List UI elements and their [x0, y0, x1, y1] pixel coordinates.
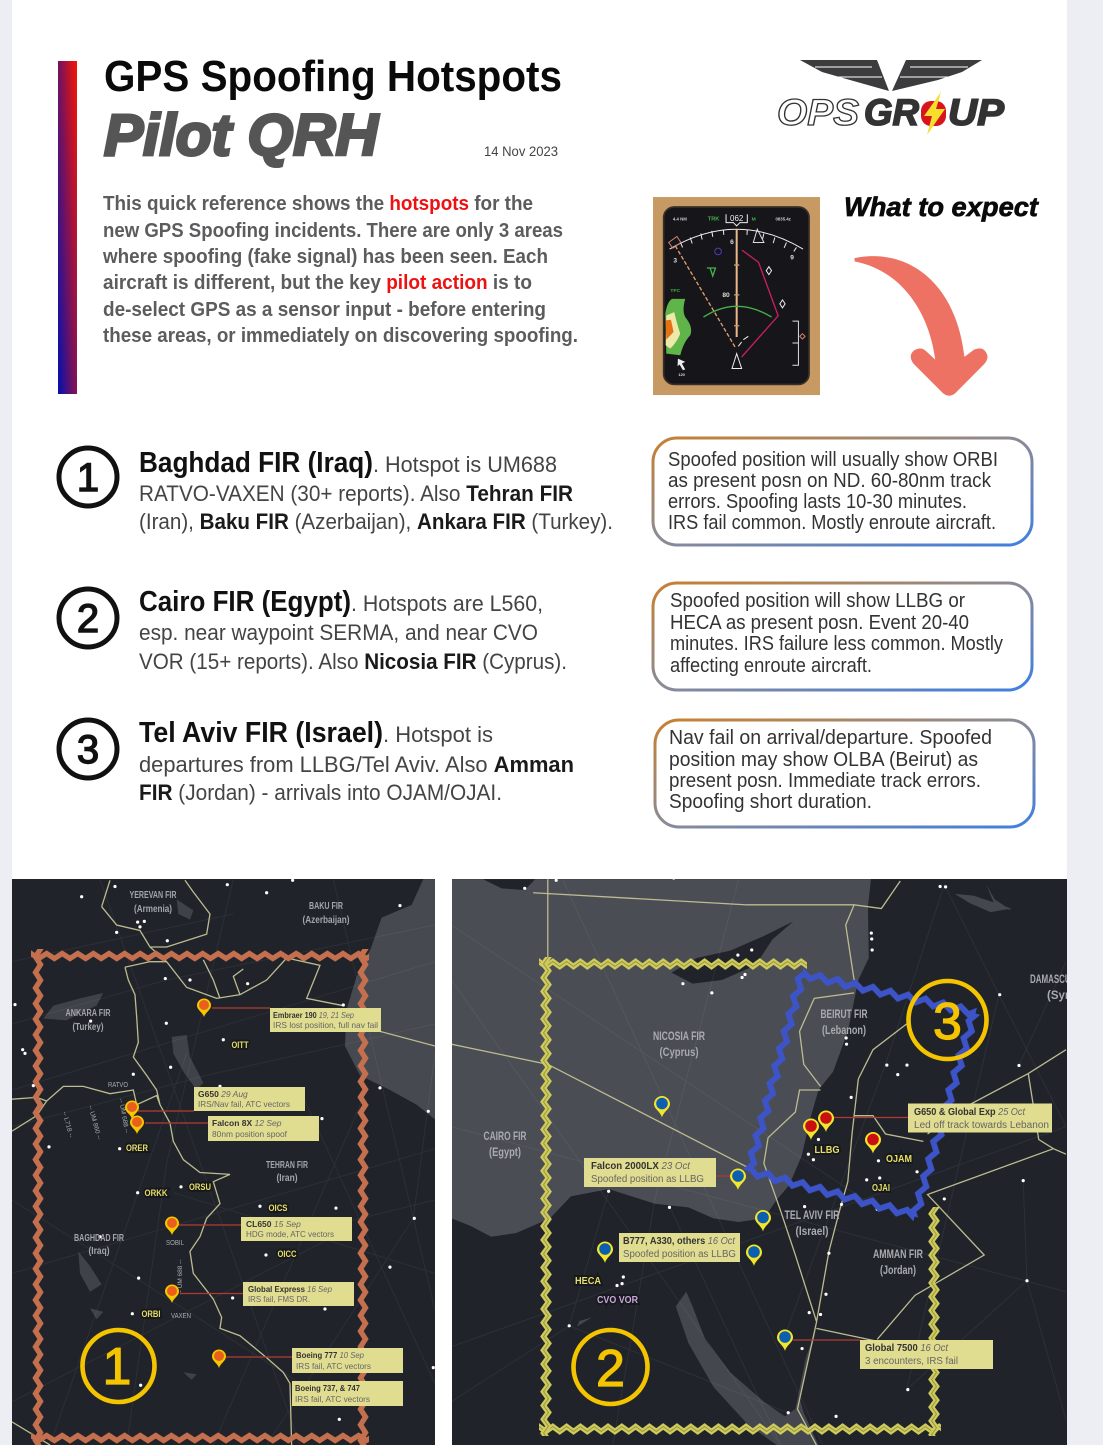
area number 3 — [908, 981, 986, 1059]
callout box 2: minutes. IRS failure less common. Mostly — [670, 633, 1003, 655]
item 3: Tel Aviv — [59, 717, 574, 805]
item 2: Cairo — [59, 586, 567, 674]
FIR labels map 2: (Israel) — [796, 1226, 829, 1238]
intro paragraph: aircraft is different, but the key pilot action is to — [103, 272, 532, 294]
logo: OPS GROUP: UP — [948, 92, 1004, 133]
intro paragraph: these areas, or immediately on discovering spoofing. — [103, 325, 578, 347]
FIR labels map 2: NICOSIA FIR — [653, 1031, 706, 1043]
intro paragraph: new GPS Spoofing incidents. There are only 3 areas — [103, 220, 563, 242]
waypoints map 1: OICS — [268, 1203, 288, 1213]
navigation display image — [653, 197, 820, 395]
waypoints map 1: ORSU — [189, 1182, 211, 1192]
area number 2: 2 — [596, 1340, 625, 1398]
navigation display image: TFC — [670, 288, 680, 294]
navigation display image: 120 — [678, 372, 686, 377]
waypoints map 2: LLBG — [814, 1144, 840, 1156]
item 1: Baghdad: RATVO-VAXEN (30+ reports). Also Tehran FIR — [139, 481, 573, 506]
incident tag: CL650: HDG mode, ATC vectors — [246, 1229, 334, 1239]
intro paragraph: where spoofing (fake signal) has been seen. Each — [102, 246, 548, 268]
area number 2 — [574, 1330, 648, 1404]
FIR labels map 1: BAGHDAD FIR — [74, 1233, 125, 1244]
map panel 2: Egypt, Cyprus, Israel, Jordan — [451, 878, 1083, 1445]
incident tag: Boeing 737 and 747: IRS fail, ATC vectors — [295, 1394, 370, 1404]
curved salmon arrow — [855, 256, 988, 396]
FIR labels map 1: BAKU FIR — [309, 901, 344, 912]
FIR labels map 1 — [66, 890, 350, 1257]
waypoints map 2: OJAI — [872, 1182, 890, 1194]
yellow zigzag boundary — [539, 957, 941, 1436]
callout box 1: as present posn on ND. 60-80nm track — [668, 470, 992, 492]
navigation display image: 6 — [730, 239, 734, 246]
incident tag: Falcon 8X — [208, 1116, 319, 1141]
incident tag: Falcon 8X: Falcon 8X 12 Sep — [212, 1118, 282, 1128]
FIR labels map 2: DAMASCUS — [1030, 974, 1076, 986]
callout box 1: errors. Spoofing lasts 10-30 minutes. — [668, 491, 967, 513]
waypoints map 1: RATVO — [108, 1080, 128, 1089]
FIR labels map 2: TEL AVIV FIR — [784, 1210, 840, 1222]
navigation display image: TRK — [708, 216, 720, 222]
incident tag: Global 7500 — [860, 1340, 993, 1369]
item 3: Tel Aviv: departures from LLBG/Tel Aviv. Also Amman — [139, 752, 574, 777]
area number 1 — [82, 1330, 154, 1402]
intro paragraph — [102, 193, 578, 347]
FIR labels map 1: YEREVAN FIR — [130, 890, 177, 901]
navigation display image: 062 — [730, 214, 744, 223]
navigation display image: 0835.4z — [776, 216, 791, 221]
callout box 2 — [653, 583, 1032, 690]
incident tag: Embraer 190: IRS lost position, full nav fail — [273, 1020, 378, 1030]
incident tag: G650: IRS/Nav fail, ATC vectors — [198, 1099, 290, 1109]
FIR labels map 2: (Jordan) — [880, 1265, 916, 1277]
incident tag: Falcon 2000LX — [584, 1158, 716, 1187]
blue zigzag boundary — [741, 966, 982, 1223]
incident tag: Global Express: IRS fail, FMS DR. — [248, 1294, 310, 1304]
waypoints map 1: -- UM 860 -- — [87, 1105, 102, 1140]
waypoints map 1: OITT — [232, 1040, 249, 1050]
what to expect heading: What to expect — [844, 192, 1039, 222]
incident leaders map 2 — [716, 1118, 908, 1340]
incident tag: Global Express: Global Express 16 Sep — [248, 1284, 332, 1294]
subtitle: Pilot QRH: Pilot QRH — [104, 103, 379, 168]
waypoints map 1: ORBI — [142, 1309, 160, 1319]
incident tag: G650 and Global Exp: Led off track towards Lebanon — [914, 1120, 1049, 1131]
item 2: Cairo: Cairo FIR (Egypt) — [139, 586, 351, 618]
waypoints map 2 — [575, 1144, 912, 1306]
FIR labels map 1: (Iraq) — [88, 1246, 110, 1257]
callout box 1: Spoofed position will usually show ORBI — [668, 449, 998, 471]
FIR labels map 1: TEHRAN FIR — [266, 1160, 309, 1171]
callout box 2: HECA as present posn. Event 20-40 — [670, 612, 969, 634]
FIR labels map 2: (Syria) — [1047, 990, 1083, 1002]
logo: OPS GROUP — [777, 60, 1004, 135]
FIR labels map 2: BEIRUT FIR — [820, 1009, 868, 1021]
incident tag: Falcon 2000LX: Spoofed position as LLBG — [591, 1174, 704, 1185]
waypoints map 1: ORKK — [144, 1188, 168, 1198]
FIR labels map 1: ANKARA FIR — [66, 1008, 111, 1019]
item 2: Cairo: 2 — [77, 597, 99, 641]
callout box 2: affecting enroute aircraft. — [670, 655, 872, 677]
incident tag: G650 and Global Exp — [908, 1104, 1052, 1132]
incident tag: CL650 — [241, 1217, 352, 1241]
navigation display image: 9 — [790, 255, 794, 262]
incident tag: Boeing 737 and 747: Boeing 737, & 747 — [295, 1383, 360, 1393]
incident pins map 2 — [597, 1096, 881, 1351]
intro paragraph: de-select GPS as a sensor input - before entering — [103, 299, 546, 321]
incident tag: Global 7500: Global 7500 16 Oct — [865, 1343, 949, 1354]
waypoints map 2: OJAM — [886, 1153, 912, 1165]
waypoints map 1: -- UM 688 -- — [117, 1098, 130, 1134]
waypoints map 1: -- UM 688 -- — [177, 1259, 184, 1295]
incident tag: Falcon 2000LX: Falcon 2000LX 23 Oct — [591, 1161, 691, 1172]
incident tag: G650 and Global Exp: G650 & Global Exp 25 Oct — [914, 1107, 1026, 1118]
callout box 1: IRS fail common. Mostly enroute aircraft. — [668, 512, 996, 534]
incident tag: Boeing 737 and 747 — [292, 1381, 403, 1406]
waypoints map 1: SOBIL — [166, 1238, 184, 1247]
callout box 3: Nav fail on arrival/departure. Spoofed — [669, 727, 992, 749]
date: 14 Nov 2023 — [484, 143, 558, 159]
area number 1: 1 — [103, 1338, 131, 1396]
incident leaders map 1 — [138, 1008, 292, 1357]
incident tag: G650: G650 29 Aug — [198, 1089, 248, 1099]
item 2: Cairo: esp. near waypoint SERMA, and near CVO — [139, 620, 538, 645]
incident pins map 1 — [125, 998, 226, 1368]
waypoints map 1: -- L718 -- — [61, 1111, 74, 1138]
incident tag: Boeing 777 — [292, 1348, 403, 1373]
incident tag: Embraer 190 — [270, 1008, 381, 1032]
item 3: Tel Aviv: Tel Aviv FIR (Israel) — [139, 717, 383, 749]
waypoints map 2: HECA — [575, 1275, 601, 1287]
item 1: Baghdad: (Iran), Baku FIR (Azerbaijan), Ankara FIR (Turkey). — [139, 509, 613, 534]
navigation display image: 80 — [722, 292, 730, 299]
callout box 1 — [653, 438, 1032, 545]
FIR labels map 2: CAIRO FIR — [484, 1131, 527, 1143]
navigation display image: 4.4 NM — [673, 216, 687, 221]
incident tag: Global Express — [243, 1282, 354, 1306]
FIR labels map 1: (Iran) — [276, 1173, 298, 1184]
incident tag: CL650: CL650 15 Sep — [246, 1219, 301, 1229]
area number 3: 3 — [933, 993, 962, 1051]
waypoints map 2: CVO VOR — [597, 1294, 638, 1306]
waypoints map 1: VAXEN — [171, 1311, 191, 1320]
incident tag: Falcon 8X: 80nm position spoof — [212, 1129, 288, 1139]
item 3: Tel Aviv: FIR (Jordan) - arrivals into OJAM/OJAI. — [139, 780, 502, 805]
FIR labels map 2: (Egypt) — [489, 1147, 521, 1159]
callout box 3 — [655, 720, 1034, 827]
FIR labels map 2 — [484, 974, 1083, 1277]
orange zigzag boundary — [31, 949, 370, 1445]
FIR labels map 1: (Turkey) — [72, 1022, 104, 1033]
incident tag: Embraer 190: Embraer 190 19, 21 Sep — [273, 1010, 354, 1020]
item 3: Tel Aviv: . Hotspot is — [383, 722, 493, 747]
item 2: Cairo: VOR (15+ reports). Also Nicosia FIR (Cyprus). — [139, 649, 567, 674]
navigation display image: 3 — [673, 257, 677, 264]
callout box 3: Spoofing short duration. — [669, 791, 872, 813]
FIR labels map 1: (Azerbaijan) — [302, 915, 350, 926]
callout box 3: present posn. Immediate track errors. — [669, 770, 981, 792]
callout box 2: Spoofed position will show LLBG or — [670, 590, 965, 612]
FIR labels map 2: AMMAN FIR — [873, 1249, 924, 1261]
navigation display image: M — [752, 216, 756, 222]
FIR labels map 2: (Cyprus) — [660, 1047, 699, 1059]
gradient side bar — [58, 61, 77, 394]
callout box 3: position may show OLBA (Beirut) as — [669, 749, 978, 771]
map panel 1: Iraq and Iran — [12, 879, 435, 1445]
logo: OPS GROUP: GR — [864, 92, 919, 133]
incident tag: Global 7500: 3 encounters, IRS fail — [865, 1356, 958, 1367]
item 2: Cairo: . Hotspots are L560, — [351, 591, 543, 616]
intro paragraph: This quick reference shows the hotspots for the — [103, 193, 533, 215]
incident tag: Boeing 777: Boeing 777 10 Sep — [296, 1350, 364, 1360]
item 1: Baghdad — [59, 447, 613, 534]
item 1: Baghdad: 1 — [77, 456, 99, 500]
FIR labels map 2: (Lebanon) — [822, 1025, 866, 1037]
FIR labels map 1: (Armenia) — [134, 904, 172, 915]
waypoints map 1: ORER — [126, 1143, 148, 1153]
title: GPS Spoofing Hotspots — [104, 52, 562, 101]
incident tag: Boeing 777: IRS fail, ATC vectors — [296, 1361, 371, 1371]
incident tag: G650 — [194, 1087, 305, 1111]
incident tag: B777, A330 — [619, 1233, 740, 1262]
waypoints map 1: OICC — [278, 1249, 297, 1259]
item 1: Baghdad: . Hotspot is UM688 — [373, 452, 557, 477]
incident tag: B777, A330: Spoofed position as LLBG — [623, 1249, 736, 1260]
waypoints map 1 — [61, 1040, 297, 1320]
item 3: Tel Aviv: 3 — [77, 728, 99, 772]
item 1: Baghdad: Baghdad FIR (Iraq) — [139, 447, 373, 479]
incident tag: B777, A330: B777, A330, others 16 Oct — [623, 1236, 736, 1247]
logo: OPS GROUP: OPS — [777, 92, 859, 133]
